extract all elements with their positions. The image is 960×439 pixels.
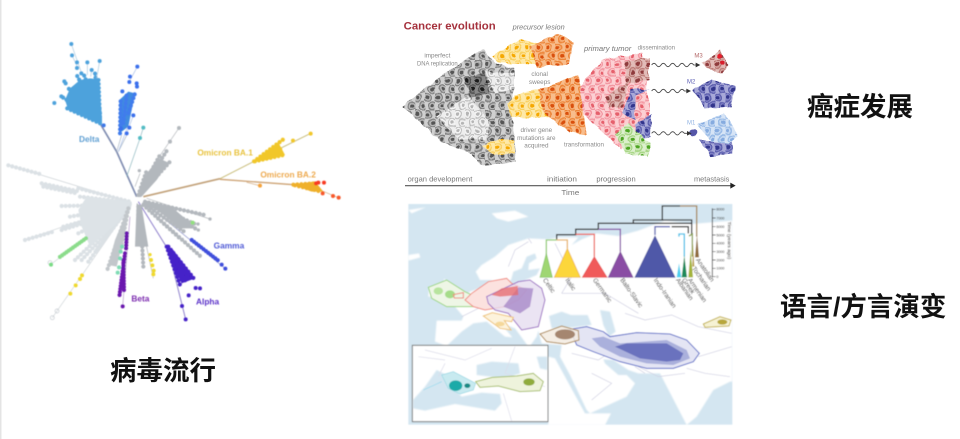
Celtic distribution	[428, 280, 479, 307]
label: Delta: Delta	[79, 134, 100, 144]
clone map	[402, 33, 738, 165]
UK & Ireland	[438, 278, 453, 300]
Armenian distribution	[540, 326, 579, 344]
time axis	[712, 208, 732, 279]
timeline	[405, 175, 736, 197]
wavy arrows	[652, 63, 697, 135]
primary tumor	[568, 53, 649, 150]
panel: cancer evolution	[402, 20, 738, 197]
annotations: dissemination	[638, 44, 675, 51]
grey clade upper	[137, 126, 181, 197]
Tocharian distribution	[703, 317, 731, 327]
annotations: precursor lesion	[512, 22, 565, 31]
timeline: Time	[561, 188, 579, 197]
time axis: 6000	[716, 225, 724, 229]
time axis: 5000	[716, 233, 724, 237]
annotations: M3	[694, 54, 703, 60]
tree branches	[8, 123, 338, 319]
language labels: Indo-Iranian	[652, 277, 678, 310]
teal-green tips	[116, 245, 124, 275]
time axis: 4000	[716, 242, 724, 246]
panel: virus phylogenetic tree	[8, 42, 341, 321]
annotations	[417, 22, 703, 149]
clade: Delta	[52, 42, 106, 127]
annotations: acquired	[524, 142, 549, 149]
time axis: 0	[716, 275, 718, 279]
annotations: driver gene	[520, 127, 553, 134]
Caspian	[600, 310, 616, 337]
precursor lesion	[492, 38, 543, 65]
annotations: mutations are	[517, 135, 556, 142]
clade: Delta sublineage	[118, 65, 139, 152]
annotations: transformation	[564, 141, 604, 148]
time axis: 8000	[716, 208, 724, 212]
timeline: organ development	[408, 175, 473, 184]
heading: 语言/方言演变: 语言/方言演变	[780, 292, 946, 322]
time axis: 3000	[716, 250, 724, 254]
label: Gamma: Gamma	[214, 240, 245, 250]
heading: 癌症发展: 癌症发展	[807, 92, 913, 122]
label: Alpha: Alpha	[196, 297, 220, 307]
clade: Gamma	[192, 240, 227, 271]
grey clade lower centre	[107, 208, 128, 272]
sea background	[408, 204, 732, 425]
time axis: 7000	[716, 216, 724, 220]
page edge	[0, 0, 2, 439]
grey clades lower right	[135, 202, 212, 267]
time axis: 2000	[716, 258, 724, 262]
language labels: Italic	[563, 277, 577, 293]
annotations: M2	[687, 80, 696, 86]
clade: Alpha	[167, 247, 202, 321]
inset map	[412, 345, 548, 422]
Black Sea	[549, 312, 592, 328]
time axis: Time (years ago)	[726, 222, 732, 259]
language labels: Germanic	[591, 277, 613, 305]
timeline: progression	[596, 175, 636, 184]
lower yellow	[482, 138, 515, 156]
panel: language evolution map	[408, 204, 732, 425]
arctic isles	[492, 211, 528, 222]
annotations: clonal	[531, 71, 548, 78]
Baltic Sea	[496, 253, 540, 287]
label: Omicron BA.2: Omicron BA.2	[260, 170, 316, 180]
annotations: imperfect	[424, 53, 451, 60]
annotations: primary tumor	[583, 44, 632, 53]
heading: 病毒流行: 病毒流行	[110, 356, 216, 386]
yellow tips	[68, 253, 156, 296]
clade: Beta	[119, 233, 127, 308]
language labels: Anatolian	[694, 257, 715, 284]
language labels: Albanian	[674, 277, 694, 302]
annotations: sweeps	[529, 79, 550, 86]
Germanic distribution	[453, 278, 527, 310]
label: Omicron BA.1: Omicron BA.1	[197, 147, 253, 157]
Balto-Slavic distribution	[487, 280, 545, 330]
language labels: Tocharian	[690, 265, 712, 293]
Africa	[548, 357, 611, 425]
clade: Omicron BA.1	[253, 132, 313, 162]
language labels: Balto-Slavic	[618, 277, 644, 310]
timeline: metastasis	[694, 175, 729, 184]
annotations: DNA replication	[417, 60, 458, 67]
clade triangles	[540, 235, 699, 277]
initiation	[507, 88, 550, 118]
language family tree	[546, 206, 697, 257]
metastasis M2	[692, 79, 735, 108]
Italic distribution	[483, 313, 513, 330]
time axis: 1000	[716, 267, 724, 271]
label: Beta: Beta	[131, 293, 150, 303]
Iceland	[408, 253, 420, 261]
title: Cancer evolution	[404, 20, 496, 32]
land masses	[408, 207, 732, 425]
timeline: initiation	[547, 175, 577, 184]
language labels	[541, 257, 715, 310]
language labels: Armenian	[686, 277, 708, 304]
pale grey radial clades	[8, 165, 132, 320]
Indo-Iranian distribution	[570, 327, 699, 368]
normal cells	[402, 49, 516, 165]
language labels: Celtic	[541, 277, 556, 295]
metastasis M1	[698, 140, 732, 157]
annotations: M1	[687, 120, 696, 126]
metastasis M3	[702, 50, 728, 74]
teal tips	[138, 126, 145, 140]
clade: Omicron BA.2	[258, 181, 341, 200]
language labels: Greek	[680, 277, 696, 296]
pale green clade	[49, 238, 86, 267]
borders	[462, 238, 732, 400]
